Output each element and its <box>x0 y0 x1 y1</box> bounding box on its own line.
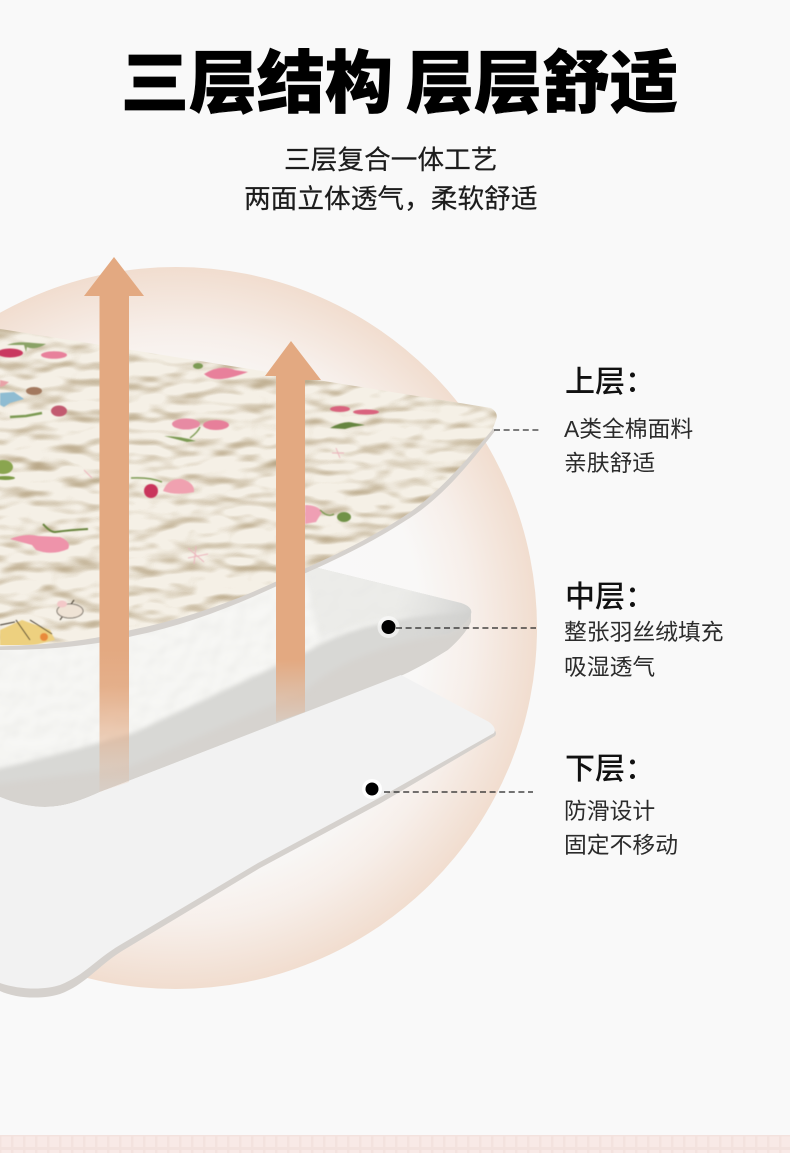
callout: middle layer: 整张羽丝绒填充 <box>564 619 724 645</box>
faint pink sparkles <box>84 448 344 564</box>
cherry centre <box>164 418 229 442</box>
bottom pink grid strip <box>0 1135 790 1153</box>
cherry lower left <box>10 524 88 553</box>
subtitle: 两面立体透气，柔软舒适 <box>244 184 538 214</box>
top layer rim <box>0 428 495 650</box>
callout: bottom layer <box>564 753 678 858</box>
callout: bottom layer: 下层： <box>565 753 655 786</box>
middle layer: cotton wadding <box>0 550 480 807</box>
title: 层层舒适 <box>406 46 678 122</box>
title: 三层结构 <box>121 46 393 122</box>
cherry upper right <box>330 406 379 429</box>
floral print <box>0 342 379 646</box>
marker and leader line: bottom layer <box>362 779 533 799</box>
callout: middle layer: 中层： <box>565 581 655 614</box>
subtitle: 三层复合一体工艺 <box>284 145 498 175</box>
leader line: top layer <box>494 429 541 431</box>
cartoon animal <box>0 600 83 646</box>
callout: top layer <box>564 366 693 476</box>
bottom layer rim <box>0 728 496 998</box>
subtitle <box>244 145 538 214</box>
title <box>121 46 678 122</box>
cherry cluster top left <box>0 342 67 359</box>
callout: middle layer: 吸湿透气 <box>564 654 655 680</box>
arrow 1 upward air flow <box>84 257 144 792</box>
callout: bottom layer: 防滑设计 <box>564 798 655 824</box>
butterfly and rose print <box>0 380 67 417</box>
callout: middle layer <box>564 581 724 680</box>
arrow 2 upward air flow <box>265 341 321 722</box>
callout: top layer: 上层： <box>565 366 655 399</box>
cherry lower centre <box>131 478 194 498</box>
callout: top layer: 亲肤舒适 <box>564 450 655 476</box>
marker and leader line: middle layer <box>378 616 536 638</box>
background gradient circle <box>0 267 537 989</box>
top layer: quilted floral cotton fabric <box>0 324 497 647</box>
layered mattress illustration <box>0 257 790 1153</box>
green leaf left <box>0 460 15 480</box>
callout: bottom layer: 固定不移动 <box>564 832 678 858</box>
cherry top middle <box>193 363 248 379</box>
callout: top layer: A类全棉面料 <box>564 416 693 442</box>
cherry right <box>305 505 351 524</box>
bottom layer: anti-slip surface <box>0 675 495 989</box>
